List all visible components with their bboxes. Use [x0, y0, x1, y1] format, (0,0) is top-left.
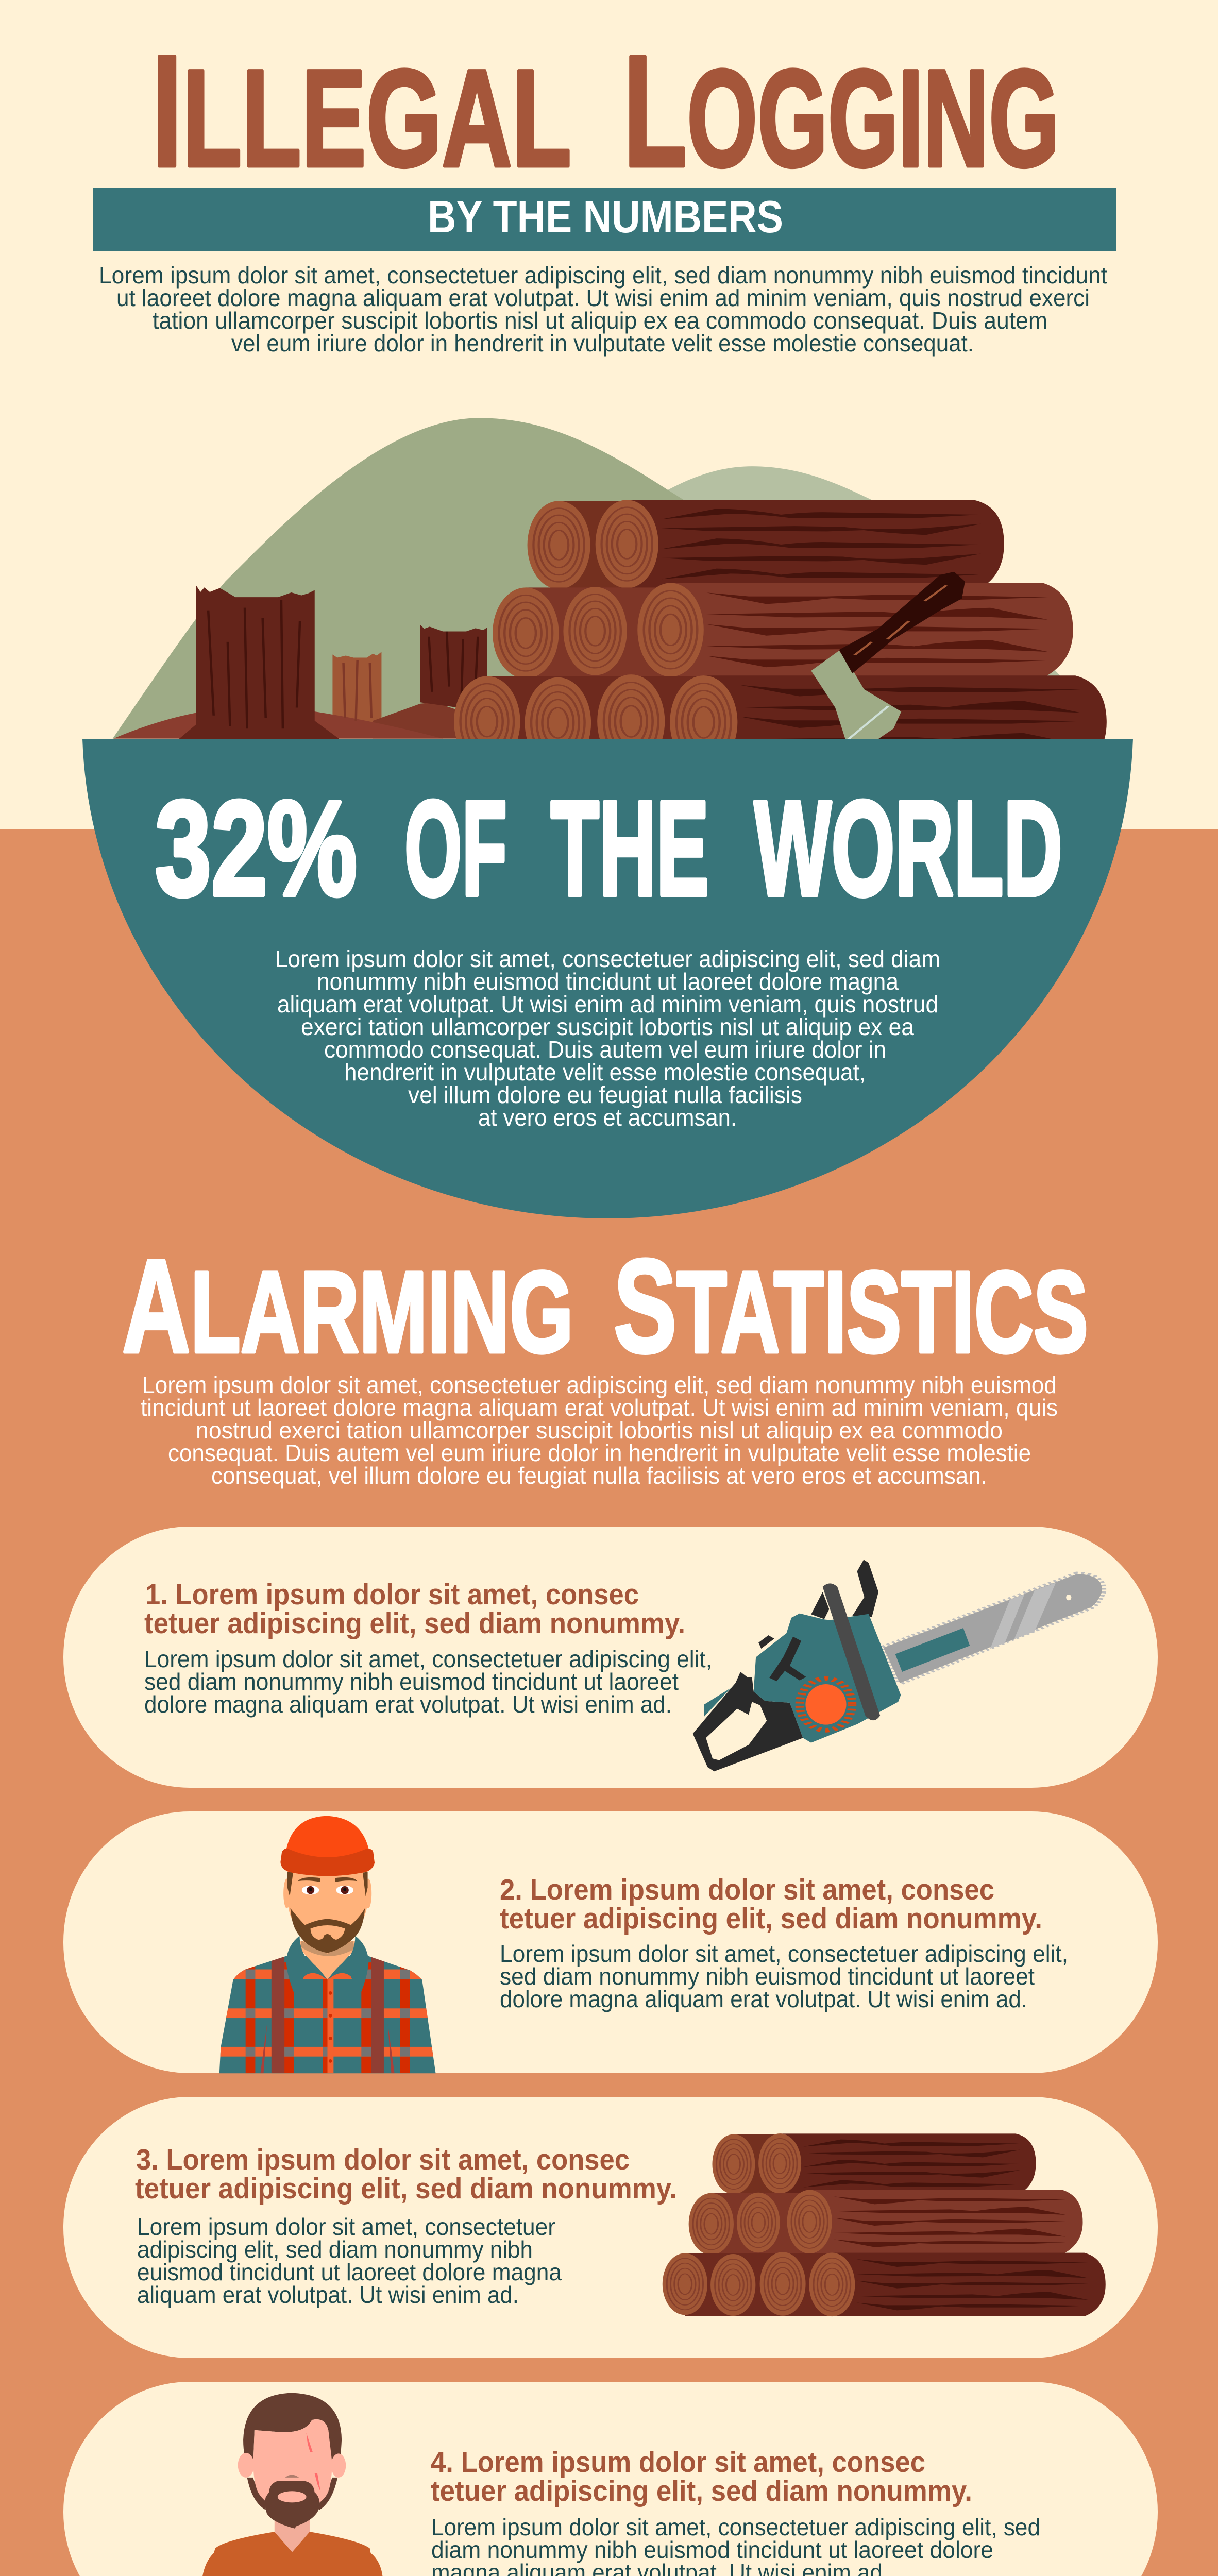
panel: statistic 4: [63, 2382, 1158, 2576]
statistic 3 body: euismod tincidunt ut laoreet dolore magna: [137, 2259, 562, 2285]
teal panel paragraph: [275, 945, 940, 1131]
statistic 2 heading: 2. Lorem ipsum dolor sit amet, consec: [500, 1873, 994, 1906]
teal panel paragraph: aliquam erat volutpat. Ut wisi enim ad minim veniam, quis nostrud: [277, 991, 938, 1018]
teal panel paragraph: hendrerit in vulputate velit esse molestie consequat,: [344, 1059, 866, 1086]
statistic 1 heading: tetuer adipiscing elit, sed diam nonummy.: [144, 1607, 685, 1640]
subtitle banner: BY THE NUMBERS: [428, 191, 783, 242]
statistic 3 heading: tetuer adipiscing elit, sed diam nonummy.: [135, 2172, 677, 2205]
statistic 3 body: aliquam erat volutpat. Ut wisi enim ad.: [137, 2281, 519, 2308]
statistic 1 body: sed diam nonummy nibh euismod tincidunt ut laoreet: [144, 1668, 679, 1695]
headline: 32% of the world: OF: [404, 773, 507, 924]
icon: prisoner mugshot: [191, 2393, 392, 2576]
statistic 3 heading: [135, 2143, 677, 2205]
panel: statistic 2: [63, 1811, 1158, 2073]
teal panel paragraph: vel illum dolore eu feugiat nulla facilisis: [408, 1081, 802, 1108]
statistic 3 body: Lorem ipsum dolor sit amet, consectetuer: [137, 2213, 555, 2240]
teal panel paragraph: nonummy nibh euismod tincidunt ut laoreet dolore magna: [317, 968, 899, 995]
statistic 1 body: dolore magna aliquam erat volutpat. Ut wisi enim ad.: [144, 1691, 672, 1718]
statistic 3 body: [137, 2213, 562, 2308]
intro paragraph: tation ullamcorper suscipit lobortis nisl ut aliquip ex ea commodo consequat. Duis autem: [153, 307, 1047, 334]
statistics paragraph: Lorem ipsum dolor sit amet, consectetuer adipiscing elit, sed diam nonummy nibh euismod: [142, 1371, 1057, 1398]
subtitle banner: [93, 188, 1116, 251]
statistics paragraph: consequat. Duis autem vel eum iriure dolor in hendrerit in vulputate velit esse molestie: [168, 1439, 1031, 1466]
background: orange lower: [0, 829, 1218, 2576]
statistics paragraph: consequat, vel illum dolore eu feugiat nulla facilisis at vero eros et accumsan.: [211, 1462, 987, 1489]
statistic 1 body: Lorem ipsum dolor sit amet, consectetuer adipiscing elit,: [144, 1646, 712, 1672]
icon: log pile: [663, 2133, 1106, 2316]
statistic 4 body: [431, 2514, 1040, 2576]
statistic 2 body: sed diam nonummy nibh euismod tincidunt ut laoreet: [500, 1963, 1035, 1990]
heading: alarming statistics: ALARMING: [122, 1231, 729, 1380]
hill: light: [621, 466, 1088, 739]
intro paragraph: ut laoreet dolore magna aliquam erat volutpat. Ut wisi enim ad minim veniam, quis nostrud exerci: [116, 284, 1090, 311]
headline: 32% of the world: 32%: [155, 773, 357, 924]
statistic 4 heading: [431, 2446, 972, 2507]
hill: dark: [113, 418, 777, 739]
statistic 2 body: dolore magna aliquam erat volutpat. Ut wisi enim ad.: [500, 1986, 1027, 2012]
tree stumps: [113, 585, 487, 739]
statistic 2 heading: [500, 1873, 1042, 1935]
statistics paragraph: [141, 1371, 1058, 1489]
teal panel paragraph: commodo consequat. Duis autem vel eum iriure dolor in: [324, 1036, 886, 1063]
background: cream top: [0, 0, 1218, 829]
panel: statistic 3: [63, 2097, 1158, 2358]
statistic 4 heading: 4. Lorem ipsum dolor sit amet, consec: [431, 2446, 925, 2479]
statistic 1 heading: 1. Lorem ipsum dolor sit amet, consec: [145, 1578, 639, 1611]
statistic 4 body: diam nonummy nibh euismod tincidunt ut laoreet dolore: [431, 2536, 993, 2563]
statistic 3 body: adipiscing elit, sed diam nonummy nibh: [137, 2236, 533, 2263]
intro paragraph: Lorem ipsum dolor sit amet, consectetuer adipiscing elit, sed diam nonummy nibh euismod tincidunt: [99, 262, 1107, 289]
statistic 4 body: Lorem ipsum dolor sit amet, consectetuer adipiscing elit, sed: [431, 2514, 1040, 2540]
statistic 4 heading: tetuer adipiscing elit, sed diam nonummy.: [431, 2475, 972, 2507]
panel: teal half-ellipse: [82, 739, 1133, 1218]
axe: [811, 572, 965, 739]
statistic 3 heading: 3. Lorem ipsum dolor sit amet, consec: [136, 2143, 630, 2176]
teal panel paragraph: Lorem ipsum dolor sit amet, consectetuer adipiscing elit, sed diam: [275, 945, 940, 972]
statistics paragraph: tincidunt ut laoreet dolore magna aliquam erat volutpat. Ut wisi enim ad minim veniam, quis: [141, 1394, 1058, 1421]
teal panel paragraph: at vero eros et accumsan.: [478, 1104, 737, 1131]
teal panel paragraph: exerci tation ullamcorper suscipit lobortis nisl ut aliquip ex ea: [301, 1013, 914, 1040]
statistic 2 heading: tetuer adipiscing elit, sed diam nonummy.: [500, 1902, 1042, 1935]
icon: lumberjack: [219, 1816, 437, 2073]
log pile: [454, 500, 1107, 769]
illustration: deforested hills, stumps, log pile and axe: [113, 418, 1107, 769]
statistic 2 body: [500, 1940, 1068, 2012]
statistic 1 body: [144, 1646, 712, 1718]
intro paragraph: vel eum iriure dolor in hendrerit in vulputate velit esse molestie consequat.: [231, 330, 974, 357]
statistic 2 body: Lorem ipsum dolor sit amet, consectetuer adipiscing elit,: [500, 1940, 1068, 1967]
icon: chainsaw: [693, 1560, 1102, 1771]
statistic 1 heading: [144, 1578, 685, 1640]
statistics paragraph: nostrud exerci tation ullamcorper suscipit lobortis nisl ut aliquip ex ea commodo: [196, 1417, 1003, 1444]
headline: 32% of the world: THE: [551, 773, 709, 924]
title: ILLEGAL: [151, 23, 735, 200]
intro paragraph: [99, 262, 1107, 357]
panel: statistic 1: [63, 1527, 1158, 1788]
